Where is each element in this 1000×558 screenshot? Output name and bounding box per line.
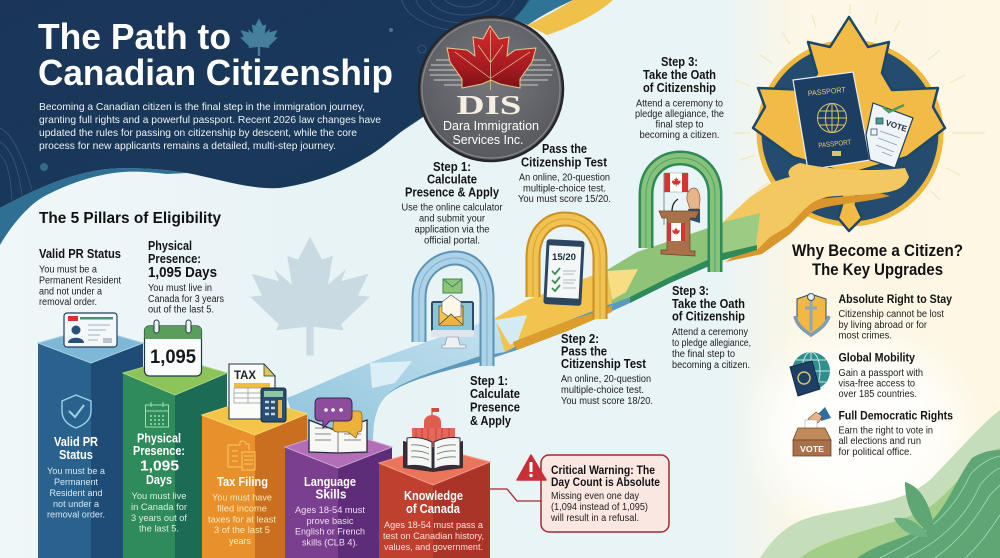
logo badge: Services Inc.	[452, 133, 524, 147]
upgrade: global mobility: visa-free access to	[838, 378, 915, 390]
text: step 1 top: Step 1:	[433, 160, 471, 174]
intro paragraph	[39, 101, 381, 152]
text: step 3 top: Take the Oath	[643, 68, 716, 82]
pillar 3: tax filing: You must have	[212, 492, 272, 504]
upgrade: global mobility: Global Mobility	[838, 350, 915, 364]
heading: why become a citizen: The Key Upgrades	[812, 261, 943, 279]
heading: why become a citizen: Why Become a Citizen?	[792, 242, 963, 260]
icon: passport	[793, 72, 870, 170]
pathway ribbon	[287, 210, 757, 440]
callout: critical warning: Critical Warning: The	[551, 465, 655, 477]
pillar 4: language skills: skills (CLB 4).	[302, 538, 358, 548]
icon: parliament and book	[403, 408, 463, 472]
icon: monitor and envelopes	[431, 279, 474, 348]
upgrade: global mobility: Gain a passport with	[838, 368, 923, 379]
emblem: passport and vote on maple leaf	[733, 4, 985, 231]
intro paragraph: process for new applicants remains a detailed, multi-step journey.	[39, 140, 336, 152]
text: step 3 top: Attend a ceremony to	[636, 98, 723, 110]
gold ribbon into emblem	[723, 163, 909, 262]
icon: shield	[62, 395, 91, 428]
caption: physical presence: Canada for 3 years	[148, 294, 224, 305]
text: step 1 top: and submit your	[419, 214, 486, 224]
pillar 2: physical presence: the last 5.	[139, 524, 179, 534]
upgrade: full democratic rights: for political office.	[838, 447, 912, 458]
text: step 3 top	[635, 55, 724, 141]
upgrade: full democratic rights: all elections and run	[838, 436, 921, 447]
pillar 1: valid PR status	[38, 313, 143, 558]
upgrade: absolute right to stay: by living abroad or for	[838, 320, 928, 331]
text: step 3 top: pledge allegiance, the	[635, 109, 724, 120]
pillar 1: valid PR status: You must be a	[47, 466, 106, 477]
icon: globe and passport	[790, 352, 830, 396]
pillar 2: physical presence	[123, 320, 227, 558]
text: step 3 top: Step 3:	[661, 55, 698, 69]
pillar 2: physical presence: 1,095	[140, 458, 179, 474]
pillar 5: knowledge of Canada	[379, 408, 490, 558]
callout: critical warning: Missing even one day	[551, 491, 639, 502]
icon: ballot box: VOTE	[800, 445, 825, 454]
pillar 3: tax filing: Tax Filing	[217, 475, 268, 489]
text: step 2 lower: multiple-choice test.	[561, 385, 644, 396]
pillar 2: physical presence: You must live	[132, 491, 186, 502]
pillar 2: physical presence: in Canada for	[131, 502, 188, 513]
logo badge	[419, 17, 563, 161]
caption: valid PR status: and not under a	[39, 286, 102, 298]
pillar 4: language skills: Language	[304, 475, 356, 489]
pillar 5: knowledge of Canada: Ages 18-54 must pass a	[384, 520, 484, 531]
text: step 3 lower: of Citizenship	[672, 310, 745, 324]
text: step 2 top: multiple-choice test.	[523, 184, 606, 194]
heading: why become a citizen	[792, 242, 963, 279]
icon: title maple leaf	[240, 18, 278, 56]
text: step 1 lower: Presence	[470, 400, 520, 414]
pillar 1: valid PR status: Valid PR	[54, 435, 98, 449]
text: step 3 top: of Citizenship	[643, 81, 716, 95]
caption: physical presence: You must live in	[148, 283, 212, 294]
text: step 1 top: application via the	[414, 224, 490, 236]
text: step 1 lower: Calculate	[470, 387, 520, 401]
icon: small calendar	[146, 402, 168, 427]
caption: physical presence	[148, 239, 224, 316]
text: step 2 lower: You must score 18/20.	[561, 396, 653, 407]
pillar 5: knowledge of Canada: of Canada	[406, 502, 461, 516]
intro paragraph: granting full rights and a powerful passport. Recent 2026 law changes have	[39, 114, 381, 126]
pillar 3: tax filing: years	[229, 536, 251, 547]
icon: test tablet	[543, 239, 585, 306]
caption: physical presence: 1,095 Days	[148, 265, 217, 281]
caption: valid PR status: Permanent Resident	[39, 276, 121, 286]
pillar 4: language skills: Ages 18-54 must	[295, 505, 365, 516]
caption: valid PR status: Valid PR Status	[39, 247, 121, 261]
icon: ballot box	[793, 407, 831, 456]
arch: step 2	[533, 219, 600, 319]
text: step 3 lower	[672, 284, 751, 371]
text: step 2 lower: Step 2:	[561, 332, 599, 346]
upgrade: full democratic rights	[793, 407, 953, 458]
caption: valid PR status	[39, 247, 121, 308]
upgrade: absolute right to stay: most crimes.	[838, 330, 892, 342]
text: step 1 lower	[470, 374, 520, 428]
icon: book with speech bubbles	[309, 398, 367, 453]
header navy panel	[0, 0, 530, 208]
text: step 1 top	[402, 160, 503, 246]
upgrade: global mobility: over 185 countries.	[838, 389, 917, 400]
pillar 2: physical presence: Presence:	[133, 444, 185, 458]
pillar 2: physical presence: 3 years out of	[131, 513, 187, 524]
arch: step 1	[419, 258, 487, 366]
text: step 2 top: An online, 20-question	[519, 172, 610, 184]
pillar 2: physical presence: Physical	[137, 432, 181, 446]
pillar 5: knowledge of Canada: values, and government.	[384, 542, 483, 553]
text: step 3 top: becoming a citizen.	[640, 130, 720, 141]
text: step 2 lower: Pass the	[561, 344, 607, 358]
pillar 4: language skills: prove basic	[306, 516, 354, 527]
callout: critical warning: will result in a refusal.	[550, 513, 639, 524]
pillar 1: valid PR status: Status	[59, 448, 93, 462]
upgrade: absolute right to stay: Absolute Right to Stay	[838, 292, 952, 306]
icon: test tablet: 15/20	[552, 252, 576, 262]
upgrade: absolute right to stay	[795, 292, 952, 342]
intro paragraph: updated the rules for passing on citizenship by descent, while the core	[39, 127, 357, 139]
text: step 3 lower: Step 3:	[672, 284, 709, 298]
text: step 2 lower: An online, 20-question	[561, 374, 651, 385]
caption: valid PR status: You must be a	[39, 264, 97, 276]
callout: critical warning: Day Count is Absolute	[551, 477, 660, 489]
icon: warning triangle	[517, 455, 546, 480]
text: step 2 top	[518, 142, 611, 205]
icon: 1,095 calendar	[144, 320, 202, 376]
pillar 1: valid PR status: Resident and	[50, 488, 102, 499]
pillar 2: physical presence: Days	[146, 473, 172, 487]
text: step 2 top: You must score 15/20.	[518, 194, 611, 205]
text: step 1 top: official portal.	[424, 236, 480, 246]
pillar 5: knowledge of Canada: Knowledge	[404, 489, 463, 503]
text: step 2 top: Citizenship Test	[521, 156, 608, 170]
pillar 3: tax filing: taxes for at least	[208, 514, 276, 526]
icon: podium and flag	[659, 173, 700, 256]
text: step 1 top: Use the online calculator	[402, 202, 503, 214]
title: Canadian Citizenship	[38, 52, 393, 93]
text: step 3 top: final step to	[656, 120, 704, 130]
icon: vote card: VOTE	[884, 118, 909, 134]
title: The Path to	[38, 16, 231, 57]
top wave accents	[0, 0, 613, 245]
text: step 3 lower: Attend a ceremony	[672, 327, 748, 338]
text: step 3 lower: to pledge allegiance,	[672, 338, 751, 349]
caption: physical presence: Physical	[148, 239, 192, 253]
upgrade: full democratic rights: Earn the right to vote in	[838, 426, 933, 436]
pillar 3: tax filing: filed income	[217, 504, 267, 514]
caption: valid PR status: removal order.	[39, 297, 97, 308]
logo badge: Dara Immigration	[443, 119, 539, 133]
text: step 2 lower: Citizenship Test	[561, 357, 647, 371]
decorative green hills	[760, 410, 1000, 558]
icon: 1,095 calendar: 1,095	[150, 347, 196, 368]
upgrade: full democratic rights: Full Democratic Rights	[838, 408, 953, 422]
arch: step 3	[646, 158, 715, 272]
caption: physical presence: Presence:	[148, 252, 201, 266]
icon: passport: PASSPORT	[818, 139, 852, 150]
callout: critical warning: (1,094 instead of 1,095)	[551, 502, 648, 513]
text: step 1 lower: & Apply	[470, 414, 511, 428]
pillar 4: language skills: English or French	[295, 526, 365, 538]
pillar 1: valid PR status: not under a	[53, 499, 100, 510]
pillar 4: language skills: Skills	[316, 488, 347, 502]
text: step 1 top: Presence & Apply	[405, 186, 499, 200]
caption: physical presence: out of the last 5.	[148, 304, 214, 316]
background maple leaf	[250, 237, 370, 356]
heading: 5 pillars: The 5 Pillars of Eligibility	[39, 210, 221, 227]
callout: critical warning	[490, 455, 669, 532]
icon: passport: PASSPORT	[807, 85, 846, 98]
title	[38, 16, 393, 93]
text: step 1 lower: Step 1:	[470, 374, 508, 388]
text: step 1 top: Calculate	[427, 172, 477, 186]
pillar 1: valid PR status: removal order.	[47, 510, 105, 520]
text: step 3 lower: the final step to	[672, 349, 735, 360]
pillar 5: knowledge of Canada: test on Canadian history,	[383, 531, 484, 542]
pillar 3: tax filing: 3 of the last 5	[214, 525, 270, 536]
logo badge: DIS	[456, 90, 522, 120]
upgrade: global mobility	[790, 350, 923, 400]
icon: tax form and calculator: TAX	[234, 368, 256, 382]
icon: vote card	[866, 103, 913, 168]
pillar 4: language skills	[285, 398, 392, 558]
intro paragraph: Becoming a Canadian citizen is the final step in the immigration journey,	[39, 101, 365, 113]
text: step 3 lower: becoming a citizen.	[672, 360, 750, 371]
pillar 1: valid PR status: Permanent	[54, 477, 98, 488]
upgrade: absolute right to stay: Citizenship cannot be lost	[838, 309, 944, 320]
icon: clipboard	[228, 441, 255, 470]
text: step 2 top: Pass the	[542, 142, 587, 156]
icon: anchor shield	[795, 294, 829, 335]
icon: ID card	[64, 313, 117, 347]
pillar 3: tax filing	[202, 364, 307, 558]
icon: tax form and calculator	[229, 364, 286, 422]
text: step 2 lower	[561, 332, 653, 407]
text: step 3 lower: Take the Oath	[672, 297, 745, 311]
